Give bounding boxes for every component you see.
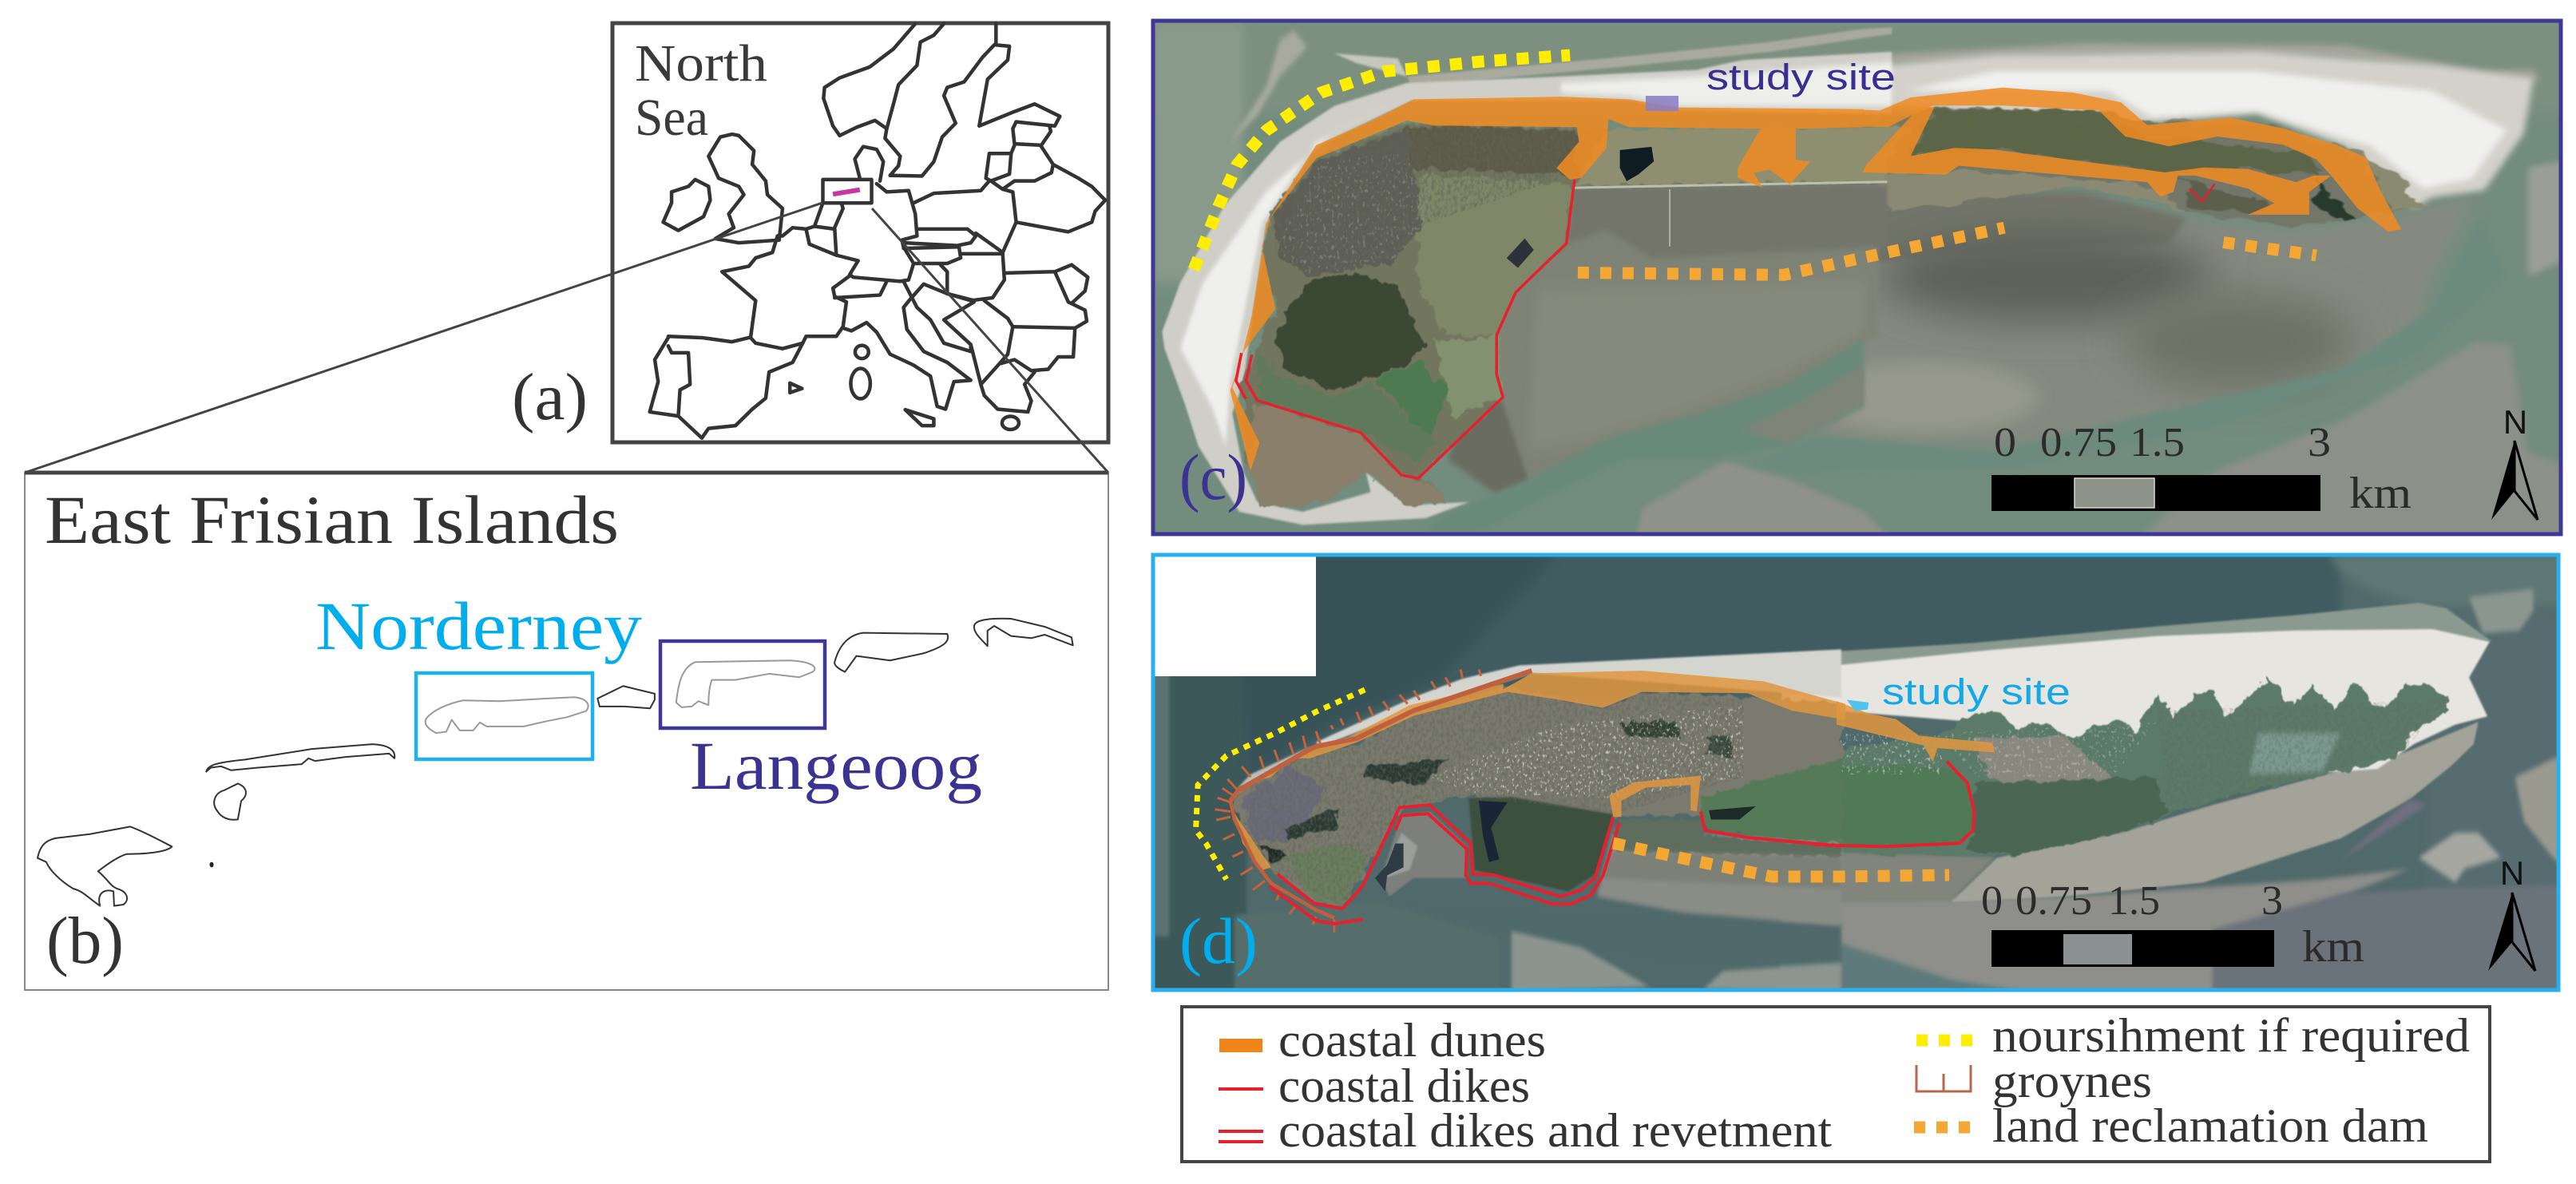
panel b: East Frisian Islands — [25, 473, 1108, 990]
Norderney label: Norderney — [315, 588, 642, 664]
satellite image d — [1104, 551, 2576, 999]
study site label d: study site — [1882, 671, 2071, 712]
north arrow c: N — [2503, 403, 2527, 441]
north arrow c — [2491, 403, 2538, 520]
panel a: Europe map — [612, 23, 1108, 442]
west Langeoog imagery — [1153, 21, 1896, 544]
Norderney box — [416, 673, 592, 759]
dune overlays c — [1230, 88, 2401, 471]
scale bar d: 1.5 — [2108, 878, 2160, 924]
scale bar c — [1991, 420, 2412, 518]
panel b label: (b) — [46, 904, 124, 978]
blank white corner box — [1155, 556, 1316, 676]
heading East Frisian Islands: East Frisian Islands — [45, 481, 619, 558]
panel c frame — [1153, 21, 2561, 534]
dune overlays d — [1231, 671, 1995, 870]
legend: groynes: groynes — [1992, 1055, 2152, 1107]
scale bar d — [1981, 878, 2364, 972]
North Sea label — [635, 34, 767, 147]
sand west — [1162, 52, 1892, 525]
scale bar d: 3 — [2261, 878, 2283, 924]
scale bar c: 3 — [2308, 420, 2331, 465]
nourishment dashes d — [1196, 690, 1365, 879]
land west — [1242, 122, 1888, 505]
mudflat west — [1500, 232, 1878, 476]
scale bar c: 0.75 — [2040, 420, 2117, 465]
study site marker c — [1646, 96, 1678, 111]
panel c: Langeoog satellite map — [1118, 16, 2576, 550]
panel c label: (c) — [1179, 441, 1247, 513]
Langeoog label: Langeoog — [690, 727, 982, 804]
satellite image c — [1118, 16, 2576, 550]
legend: coastal dunes: coastal dunes — [1278, 1014, 1546, 1067]
nourishment dashes c — [1194, 55, 1570, 270]
zoom line from inset to panel b left corner — [25, 203, 822, 473]
zoom line from inset to panel b right corner — [872, 208, 1108, 473]
Europe country outlines — [650, 24, 1105, 438]
panel a label: (a) — [512, 360, 588, 434]
island outlines — [38, 619, 1073, 906]
coastal dikes and revetment d — [1269, 761, 1974, 924]
panel d: Norderney satellite map — [1104, 551, 2576, 999]
scale bar c: 0 — [1994, 420, 2016, 465]
legend: nourishment: noursihment if required — [1992, 1009, 2470, 1062]
legend: land reclamation dam: land reclamation dam — [1992, 1099, 2428, 1152]
panel d label: (d) — [1179, 905, 1258, 977]
panel d frame — [1153, 555, 2558, 990]
scale bar d: km — [2302, 922, 2364, 972]
study site marker d — [1847, 699, 1869, 711]
scale bar d: 0.75 — [2015, 878, 2092, 924]
north arrow d — [2488, 854, 2535, 971]
legend: groynes — [1916, 1055, 2152, 1107]
land reclamation dam d — [1613, 843, 1949, 877]
North Sea label: Sea — [635, 89, 708, 147]
west Norderney imagery — [1145, 551, 1841, 995]
Langeoog box — [660, 641, 825, 728]
study site label c: study site — [1706, 57, 1896, 97]
groyne line d — [1215, 669, 1532, 933]
scale bar c: 1.5 — [2130, 420, 2185, 465]
east Norderney imagery — [1215, 557, 2557, 988]
coastal dikes c — [1236, 180, 2214, 478]
land reclamation dam c — [1578, 228, 2316, 275]
scale bar d: 0 — [1981, 878, 2003, 924]
legend: coastal dikes: coastal dikes — [1278, 1059, 1530, 1112]
legend: coastal dikes and revetment: coastal dikes and revetment — [1278, 1104, 1832, 1157]
North Sea label: North — [635, 34, 767, 93]
legend — [1182, 1007, 2490, 1162]
scale bar c: km — [2349, 469, 2412, 518]
north arrow d: N — [2500, 854, 2524, 892]
